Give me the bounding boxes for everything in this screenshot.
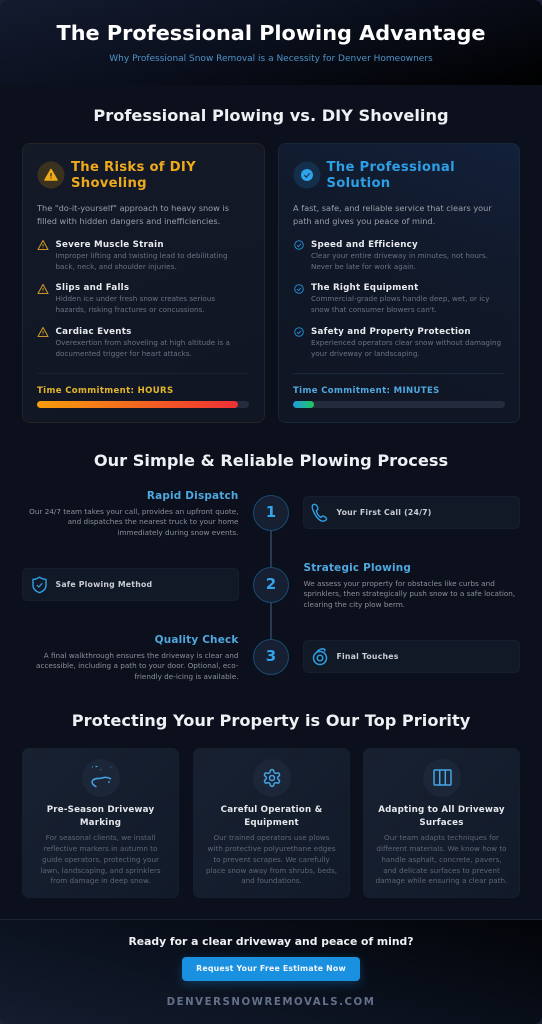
marking text: guide operators, protecting your	[42, 855, 159, 864]
professional panel heading	[326, 160, 455, 191]
step 2 box	[22, 568, 239, 601]
benefit: equipment: snow that consumer blowers can't.	[311, 305, 437, 314]
icon: gear	[253, 759, 291, 797]
icon: check	[294, 327, 304, 337]
benefit: safety: Safety and Property Protection	[311, 327, 471, 337]
risk: slips: hazards, risking fractures or concussions.	[56, 305, 205, 314]
marking text: For seasonal clients, we install	[46, 833, 155, 842]
heading: comparison: Professional Plowing vs. DIY Shoveling	[93, 106, 449, 125]
surfaces text: and delicate surfaces to prevent	[383, 866, 500, 875]
risk: muscle strain	[38, 240, 228, 270]
surfaces text	[376, 833, 507, 885]
icon: warning	[38, 284, 48, 294]
risk: cardiac: Overexertion from shoveling at high altitude is a	[56, 338, 230, 347]
surfaces heading: Surfaces	[419, 818, 464, 828]
risk: slips: Hidden ice under fresh snow creates serious	[56, 294, 215, 303]
benefit: speed: Never be late for work again.	[311, 262, 416, 270]
benefit: equipment	[294, 283, 490, 314]
step 1 number: 1	[266, 503, 276, 521]
CTA button: Request Your Free Estimate Now	[196, 964, 346, 973]
DIY panel heading: The Risks of DIY	[71, 160, 196, 174]
step 2 number	[253, 567, 289, 603]
operation text	[206, 833, 337, 885]
operation text: with protective polyurethane edges	[208, 844, 336, 853]
DIY intro: filled with hidden dangers and inefficiencies.	[37, 216, 220, 226]
risk: slips: Slips and Falls	[56, 283, 129, 293]
icon: warning badge	[38, 162, 64, 188]
operation text: to prevent scrapes. We carefully	[213, 855, 330, 864]
step 3 text: A final walkthrough ensures the driveway is clear and	[44, 650, 238, 660]
step 1 text	[29, 490, 238, 537]
step 2 text: sprinklers, then strategically push snow to a safe location,	[304, 589, 515, 598]
CTA heading: Ready for a clear driveway and peace of mind?	[128, 935, 414, 948]
operation text: place snow away from shrubs, beds,	[206, 866, 337, 875]
panel: DIY risks	[22, 143, 265, 423]
time commitment label: Time Commitment: MINUTES	[293, 386, 440, 396]
professional intro	[293, 203, 492, 226]
panel: marking	[22, 748, 179, 898]
step 3 number	[253, 639, 289, 675]
operation heading: Careful Operation &	[221, 805, 322, 815]
surfaces heading: Adapting to All Driveway	[378, 805, 505, 815]
step 3 text: accessible, including a path to your door. Optional, eco-	[36, 661, 238, 670]
icon: check	[294, 240, 304, 250]
time bar	[293, 400, 505, 408]
icon: warning	[38, 240, 48, 250]
step 2 box: Safe Plowing Method	[56, 580, 152, 588]
operation heading: Equipment	[244, 818, 299, 828]
step 3 text	[36, 634, 238, 681]
step 2 text: We assess your property for obstacles like curbs and	[304, 578, 495, 588]
icon: shield	[32, 576, 47, 594]
icon: touches	[312, 648, 328, 666]
risk: cardiac	[38, 326, 230, 358]
benefit: speed: Speed and Efficiency	[311, 240, 418, 250]
CTA button	[182, 957, 360, 980]
icon: marking	[82, 759, 120, 797]
step 1 text: Rapid Dispatch	[147, 490, 238, 502]
step 1 box	[303, 496, 520, 529]
heading: protection: Protecting Your Property is Our Top Priority	[72, 711, 470, 730]
marking heading: Pre-Season Driveway	[47, 805, 154, 815]
marking text: reflective markers in autumn to	[44, 844, 157, 853]
step 1 box: Your First Call (24/7)	[336, 508, 432, 516]
operation text: Our trained operators use plows	[214, 833, 329, 842]
benefit: equipment: The Right Equipment	[311, 283, 418, 293]
icon: columns	[423, 759, 461, 797]
risk: cardiac: Cardiac Events	[56, 327, 131, 337]
operation text: and foundations.	[241, 876, 302, 885]
benefit: safety	[294, 327, 501, 358]
DIY intro	[37, 203, 229, 226]
step 3 box: Final Touches	[336, 652, 399, 660]
icon: check	[294, 284, 304, 294]
icon: warning	[38, 326, 48, 337]
panel: professional solution	[278, 143, 520, 423]
icon: phone	[312, 504, 328, 522]
benefit: safety: your driveway or landscaping.	[311, 348, 420, 358]
icon: check badge	[294, 162, 320, 188]
heading: process: Our Simple & Reliable Plowing Process	[94, 451, 448, 470]
process timeline	[22, 490, 520, 681]
header banner	[0, 0, 542, 85]
subtitle: Why Professional Snow Removal is a Necessity for Denver Homeowners	[109, 54, 433, 64]
benefit: speed	[294, 240, 488, 270]
step 2 number: 2	[266, 575, 276, 593]
surfaces text: damage while ensuring a clear path.	[376, 876, 507, 885]
panel: operation	[193, 748, 350, 898]
professional panel heading: Solution	[326, 176, 390, 191]
risk: muscle strain: back, neck, and shoulder injuries.	[56, 262, 177, 270]
step 3 box	[303, 640, 520, 673]
step 3 text: Quality Check	[155, 634, 238, 646]
footer call to action	[0, 919, 542, 1024]
step 3 number: 3	[266, 647, 276, 665]
time bar	[37, 400, 249, 408]
surfaces text: handle asphalt, concrete, pavers,	[381, 855, 502, 864]
marking heading: Marking	[80, 818, 121, 828]
surfaces heading	[378, 805, 505, 828]
title: The Professional Plowing Advantage	[57, 21, 485, 45]
step 1 text: Our 24/7 team takes your call, provides an upfront quote,	[29, 506, 238, 516]
step 1 number	[253, 495, 289, 531]
benefit: safety: Experienced operators clear snow without damaging	[311, 338, 501, 347]
step 1 text: immediately during snow events.	[117, 528, 238, 537]
benefit: equipment: Commercial-grade plows handle deep, wet, or icy	[311, 294, 489, 303]
DIY panel heading	[71, 160, 196, 191]
professional intro: A fast, safe, and reliable service that clears your	[293, 203, 492, 213]
DIY panel heading: Shoveling	[71, 176, 147, 191]
marking heading	[47, 805, 154, 828]
professional panel heading: The Professional	[326, 160, 455, 174]
time commitment label: Time Commitment: HOURS	[37, 386, 173, 396]
operation heading	[221, 805, 322, 828]
marking text	[40, 833, 161, 885]
website: DENVERSNOWREMOVALS.COM	[167, 996, 375, 1008]
step 2 text: Strategic Plowing	[304, 562, 411, 574]
risk: muscle strain: Improper lifting and twisting lead to debilitating	[56, 251, 228, 260]
step 2 text	[304, 562, 515, 609]
step 1 text: and dispatches the nearest truck to your home	[68, 517, 238, 526]
marking text: from damage in deep snow.	[51, 876, 150, 885]
risk: muscle strain: Severe Muscle Strain	[56, 240, 164, 250]
benefit: speed: Clear your entire driveway in minutes, not hours.	[311, 251, 488, 260]
panel: surfaces	[363, 748, 520, 898]
surfaces text: Our team adapts techniques for	[384, 833, 499, 842]
DIY intro: The "do-it-yourself" approach to heavy snow is	[37, 203, 229, 213]
risk: slips	[38, 283, 215, 314]
professional intro: path and gives you peace of mind.	[293, 216, 435, 226]
step 2 text: clearing the city plow berm.	[304, 600, 405, 609]
risk: cardiac: documented trigger for heart attacks.	[56, 348, 192, 358]
surfaces text: different materials. We know how to	[376, 844, 507, 853]
marking text: lawn, landscaping, and sprinklers	[40, 866, 161, 875]
step 3 text: friendly de-icing is available.	[134, 672, 238, 681]
